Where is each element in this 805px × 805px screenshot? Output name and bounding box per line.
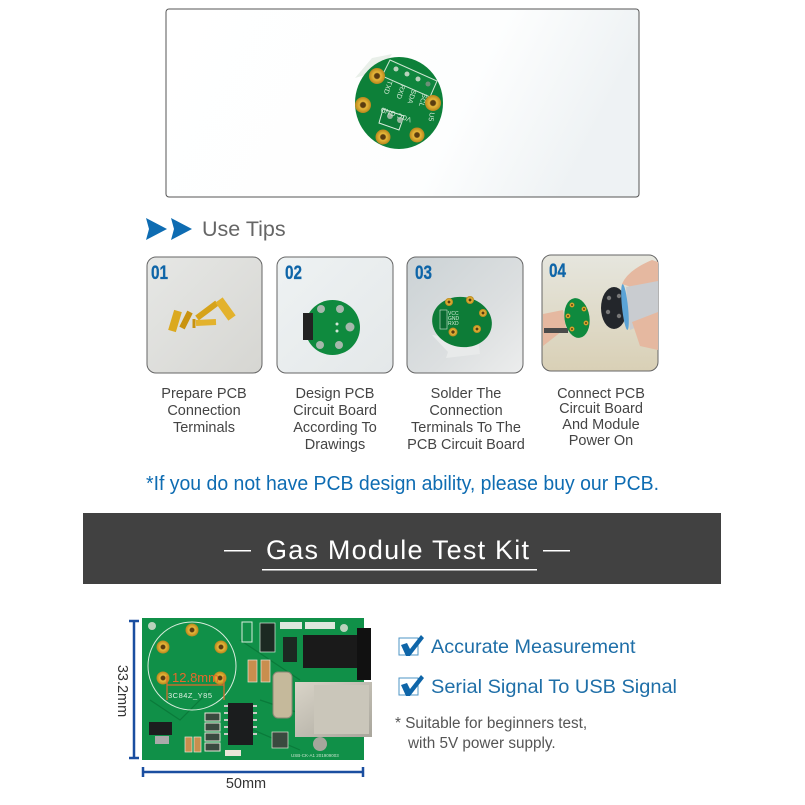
photo: round PCB with five gold terminals: TXD: [382, 79, 393, 95]
caption 02: Drawings: [305, 437, 365, 453]
heading: Use Tips: Use Tips: [202, 217, 286, 241]
icon: checkbox: [399, 635, 424, 656]
photo: round PCB with five gold terminals: U5: [426, 112, 435, 122]
photo: test kit circuit board with dimensions: [142, 618, 372, 760]
icon: checkbox: [399, 675, 424, 696]
banner: Gas Module Test Kit: Gas Module Test Kit: [266, 535, 529, 565]
photo: round PCB with five gold terminals: [355, 54, 443, 149]
caption 03: Terminals To The: [411, 420, 521, 436]
photo: round PCB with five gold terminals: RXD: [395, 83, 406, 100]
dimension: 12.8mm: 12.8mm: [172, 670, 219, 685]
heading: Use Tips: [146, 217, 286, 241]
caption 02: Design PCB: [296, 386, 374, 402]
card 03: soldered PCB: RXD: [448, 321, 459, 327]
dimension: width 50mm: [143, 767, 363, 792]
card 03: soldered PCB: VCC: [448, 311, 459, 317]
photo: test kit circuit board with dimensions: USB-CK-A1 201909003: [291, 753, 339, 758]
photo: test kit circuit board with dimensions: 3C84Z_Y85: [168, 691, 213, 700]
caption 03: Connection: [429, 403, 503, 419]
caption 04: Circuit Board: [559, 401, 643, 417]
caption 03: PCB Circuit Board: [407, 437, 525, 453]
feature: Serial Signal To USB Signal: Serial Signal To USB Signal: [431, 676, 677, 698]
card 03: soldered PCB: GND: [448, 316, 460, 322]
photo: round PCB with five gold terminals: VCC GND: [380, 105, 413, 123]
card 04: connecting PCB to module: 04: [549, 261, 566, 282]
caption 01: Prepare PCB: [161, 386, 247, 402]
dimension: height 33.2mm: [114, 621, 139, 758]
card 01: connection terminals: [147, 257, 262, 373]
note: PCB purchase: *If you do not have PCB design ability, please buy our PCB.: [146, 473, 659, 495]
caption 04: And Module: [562, 417, 640, 433]
caption 02: According To: [293, 420, 377, 436]
caption 02: Circuit Board: [293, 403, 377, 419]
dimension: 12.8mm: [167, 670, 224, 700]
card 03: soldered PCB: 03: [415, 263, 432, 284]
dimension: width 50mm: 50mm: [226, 776, 266, 792]
card 01: connection terminals: 01: [151, 263, 168, 284]
caption 04: Power On: [569, 433, 633, 449]
card 02: PCB design: 02: [285, 263, 302, 284]
photo: round PCB with five gold terminals: SDA: [406, 88, 417, 105]
feature: Accurate Measurement: Accurate Measurement: [431, 636, 636, 658]
caption 01: Terminals: [173, 420, 235, 436]
banner: Gas Module Test Kit: [83, 513, 721, 584]
card 03: soldered PCB: [407, 257, 523, 373]
dimension: height 33.2mm: 33.2mm: [114, 665, 130, 717]
panel: top photo of round PCB: [166, 9, 639, 197]
caption 04: Connect PCB: [557, 386, 645, 402]
photo: round PCB with five gold terminals: SCL: [417, 92, 428, 108]
caption 03: Solder The: [431, 386, 501, 402]
icon: double blue arrows: [146, 218, 192, 240]
note: suitability: * Suitable for beginners test,: [395, 715, 587, 732]
caption 01: Connection: [167, 403, 241, 419]
card 02: PCB design: [277, 257, 393, 373]
note: suitability: with 5V power supply.: [407, 735, 556, 752]
card 04: connecting PCB to module: [542, 255, 658, 371]
